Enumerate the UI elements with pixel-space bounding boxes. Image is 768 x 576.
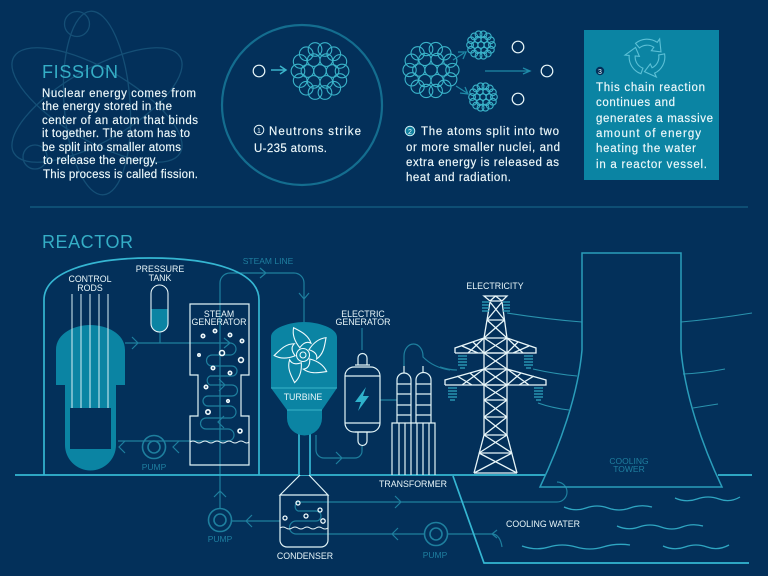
label: control rods	[68, 274, 112, 293]
icon: uranium nucleus	[291, 43, 349, 99]
label: cooling water: COOLING WATER	[506, 519, 580, 529]
text: step 3	[596, 67, 713, 171]
transformer	[392, 366, 435, 475]
text: step 3: This chain reaction	[596, 82, 705, 94]
icon: turbine fan	[274, 326, 332, 383]
pump: reactor loop	[142, 436, 167, 472]
text: step 2	[405, 126, 560, 184]
label: pressure tank: PRESSURE	[136, 264, 184, 274]
text: step 2: 2	[408, 129, 412, 136]
icon: neutron	[253, 65, 265, 77]
atom background decoration	[0, 9, 198, 197]
containment building and ground	[15, 258, 752, 563]
panel: step 3 chain reaction	[584, 29, 719, 180]
reactor vessel with control rods	[56, 274, 125, 471]
panel: step 2 atoms split	[403, 31, 560, 184]
chart: steam and water pipes	[118, 268, 567, 547]
label: steam generator: GENERATOR	[192, 317, 246, 327]
label: transformer: TRANSFORMER	[379, 479, 447, 489]
text: step 1: 1	[257, 128, 261, 135]
text block: fission explanation: This process is called fission.	[43, 169, 198, 181]
icon: small nucleus bottom	[469, 83, 497, 111]
text: step 1: U-235 atoms.	[254, 143, 327, 155]
heading: reactor: REACTOR	[42, 232, 133, 252]
text: step 3: amount of energy	[596, 128, 701, 140]
pylon: electricity	[445, 296, 546, 473]
pump: reactor loop: PUMP	[142, 462, 167, 472]
text: step 3: 3	[598, 69, 602, 76]
icon: splitting nucleus	[403, 42, 459, 98]
text: step 2: extra energy is released as	[406, 157, 559, 169]
icon: lightning bolt	[355, 387, 369, 411]
text: step 3: in a reactor vessel.	[596, 159, 707, 171]
label: electric generator	[336, 309, 390, 327]
label: electric generator: ELECTRIC	[341, 309, 385, 319]
cooling tower	[540, 253, 722, 487]
text: step 2: or more smaller nuclei, and	[406, 142, 560, 154]
label: cooling tower	[609, 456, 649, 474]
label: cooling tower: COOLING	[609, 456, 649, 466]
label: electricity: ELECTRICITY	[466, 281, 524, 291]
label: control rods: RODS	[77, 283, 103, 293]
pump: cooling water: PUMP	[423, 550, 448, 560]
bubbles	[198, 329, 244, 433]
label: pressure tank	[136, 264, 184, 283]
pressure tank	[136, 264, 184, 332]
arrows: split direction	[453, 52, 530, 94]
label: steam generator: STEAM	[204, 309, 234, 319]
text: step 1	[254, 125, 361, 155]
text block: fission explanation: Nuclear energy comes from	[42, 88, 196, 100]
text block: fission explanation: it together. The atom has to	[42, 128, 190, 140]
text block: fission explanation: the energy stored in the	[42, 101, 172, 113]
text: step 1: Neutrons strike	[269, 126, 361, 138]
arrow: neutron to nucleus	[271, 66, 286, 74]
heading: fission: FISSION	[42, 62, 118, 82]
electric generator	[336, 309, 390, 446]
text: step 3: generates a massive	[596, 113, 713, 125]
label: steam generator	[192, 309, 246, 327]
turbine	[271, 322, 337, 475]
text block: fission explanation	[42, 88, 198, 181]
panel: step 1 neutron strike	[222, 25, 382, 185]
condenser	[277, 475, 333, 561]
icon: small nucleus top	[467, 31, 495, 59]
label: control rods: CONTROL	[68, 274, 112, 284]
icon: recycle arrows	[616, 29, 679, 89]
label: steam line: STEAM LINE	[243, 256, 294, 266]
label: turbine: TURBINE	[284, 392, 322, 402]
label: electric generator: GENERATOR	[336, 317, 390, 327]
text block: fission explanation: be split into smaller atoms	[42, 142, 181, 154]
cooling water waves	[522, 497, 740, 549]
pump: condenser left	[208, 508, 233, 544]
steam generator	[190, 304, 249, 465]
pylon insulators	[448, 302, 543, 400]
label: condenser: CONDENSER	[277, 551, 333, 561]
pump: cooling water	[423, 522, 448, 560]
icon: released neutrons	[512, 41, 553, 105]
text: step 3: continues and	[596, 97, 675, 109]
power lines	[507, 313, 752, 410]
pump: condenser left: PUMP	[208, 534, 233, 544]
text: step 3: heating the water	[596, 143, 696, 155]
label: pressure tank: TANK	[149, 273, 172, 283]
text: step 2: heat and radiation.	[406, 172, 511, 184]
bubbles	[283, 501, 325, 523]
text: step 2: The atoms split into two	[421, 126, 559, 138]
text block: fission explanation: to release the energy.	[43, 155, 158, 167]
text block: fission explanation: center of an atom that binds	[42, 115, 198, 127]
label: cooling tower: TOWER	[613, 464, 645, 474]
